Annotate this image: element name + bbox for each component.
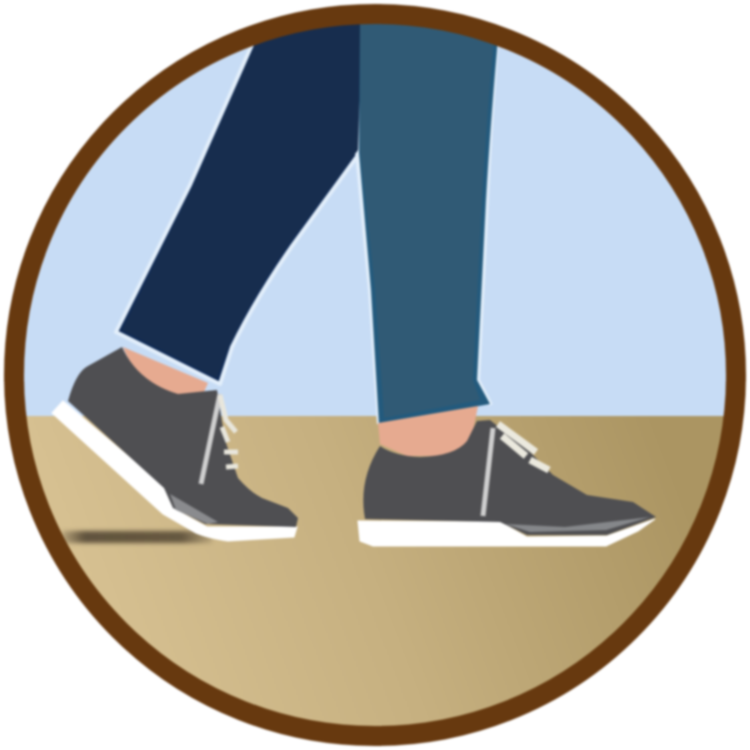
back shoe sole stripe — [170, 494, 218, 524]
front leg halo — [357, 30, 498, 424]
front shoe sole — [358, 519, 655, 546]
front shoe upper — [363, 420, 656, 535]
back leg trousers inner fill — [354, 25, 362, 154]
shoe shadow — [62, 531, 212, 543]
front ankle — [378, 406, 478, 456]
back shoe upper — [68, 347, 298, 527]
front leg trousers — [359, 20, 499, 424]
back shoe sole — [52, 401, 297, 541]
ground — [25, 414, 725, 728]
front shoe vertical lace — [483, 428, 493, 516]
back shoe lace loops — [220, 395, 238, 467]
sky — [23, 46, 727, 417]
back leg trousers — [116, 20, 362, 384]
front shoe — [358, 420, 656, 546]
back shoe — [52, 347, 298, 541]
front shoe laces — [498, 424, 549, 470]
front leg trousers inner fill — [360, 20, 494, 418]
front shoe sole stripe — [505, 517, 650, 532]
back ankle — [123, 347, 208, 394]
back shoe laces — [201, 394, 220, 484]
